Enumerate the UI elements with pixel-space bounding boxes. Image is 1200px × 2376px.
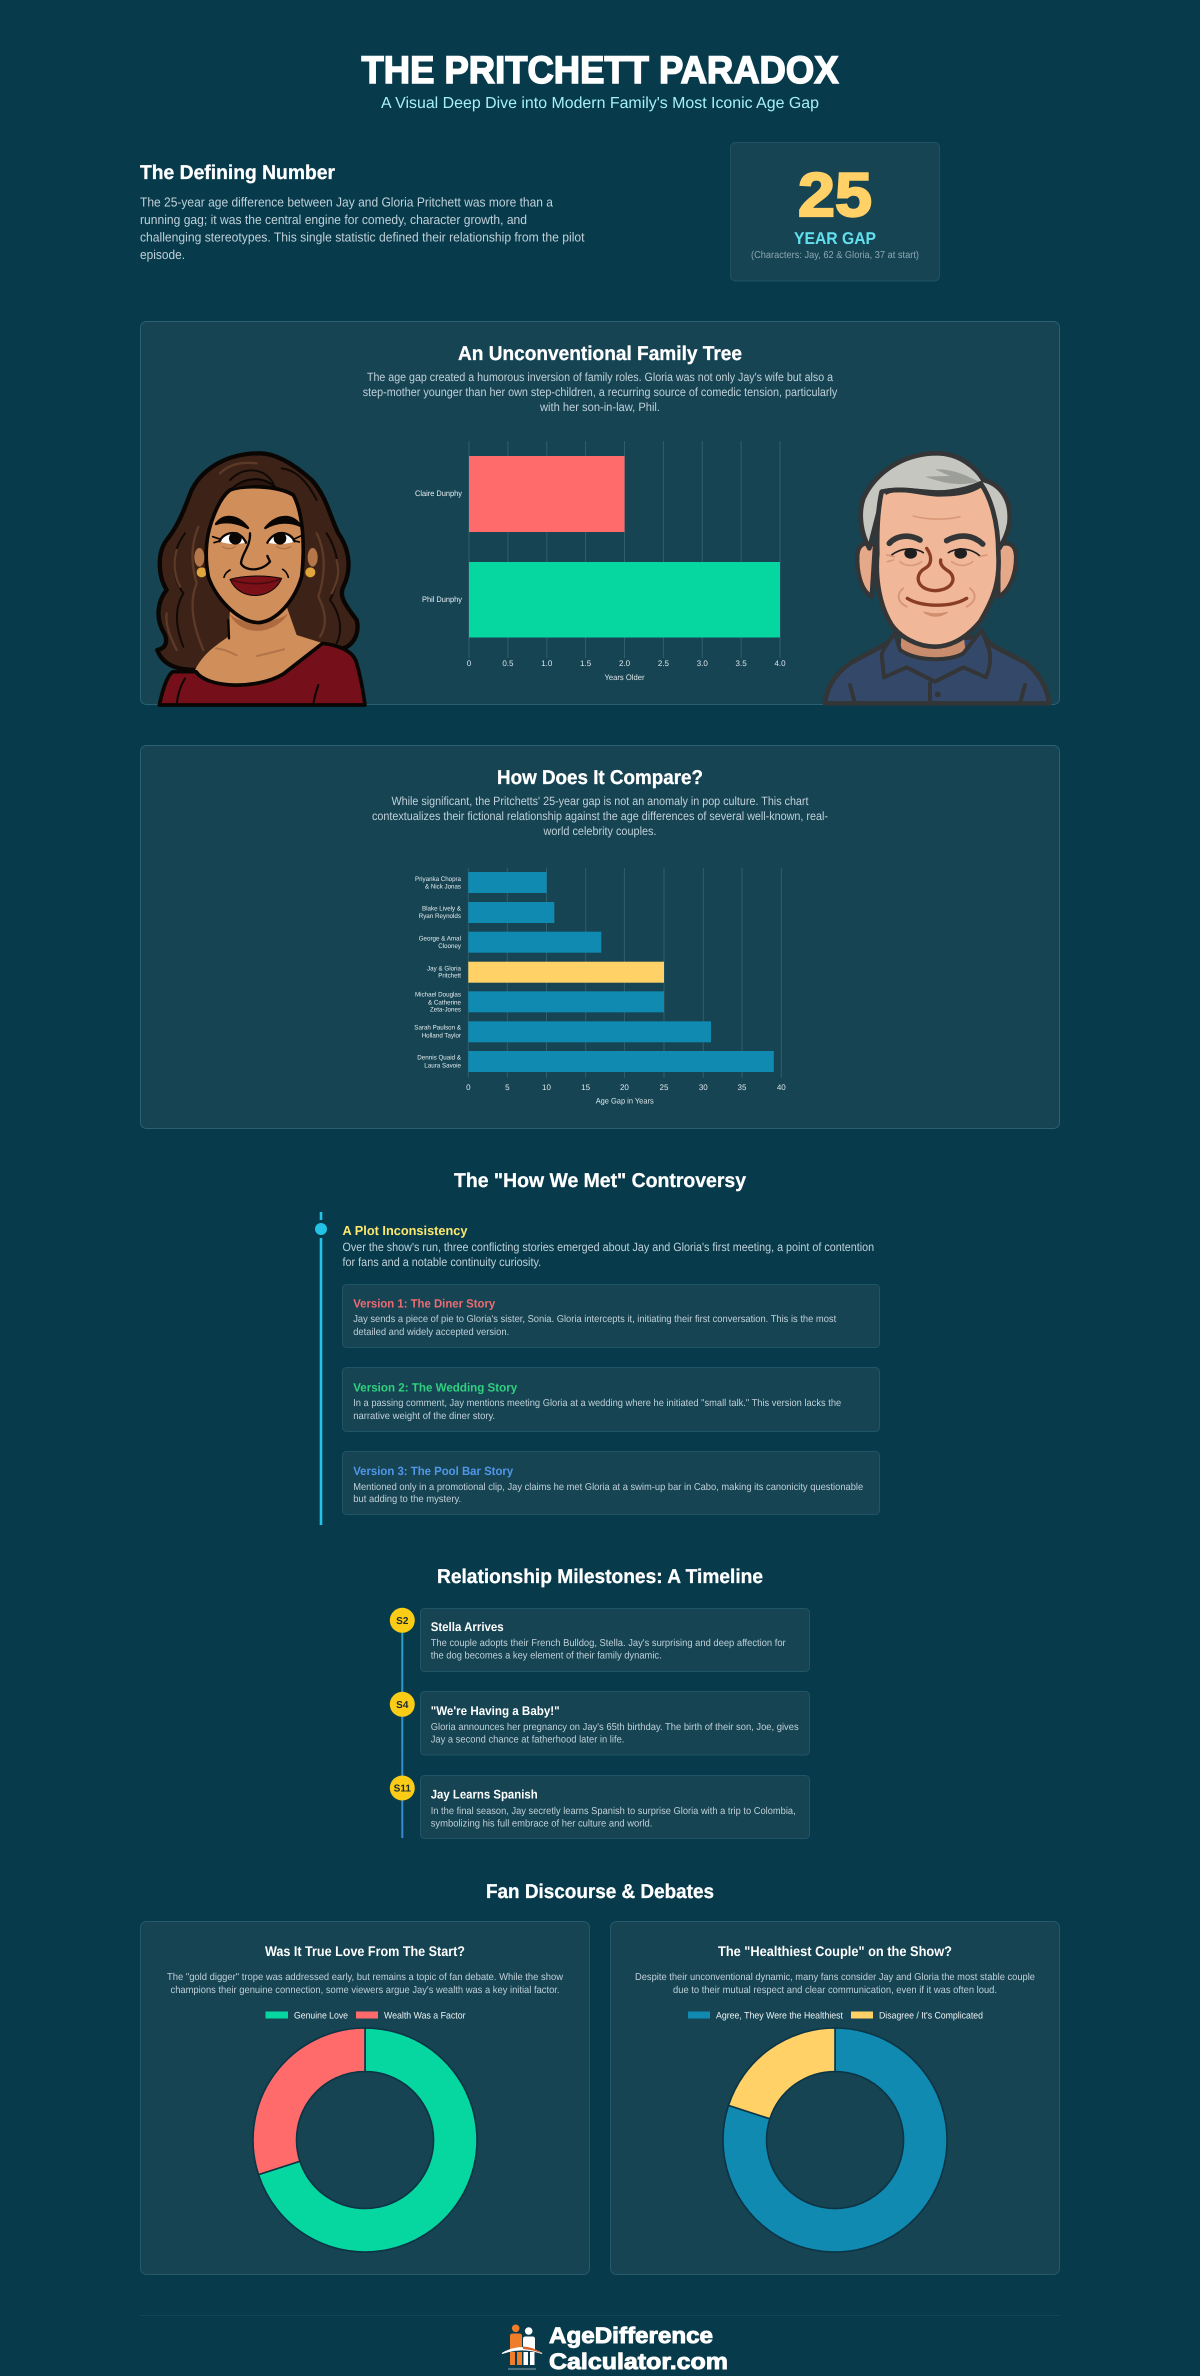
category labels [415,489,462,604]
heading: the defining number: The Defining Number [140,162,335,184]
panel: an unconventional family tree [140,322,1060,705]
subtitle: A Visual Deep Dive into Modern Family's Most Iconic Age Gap [381,95,819,112]
gridlines [468,868,781,1078]
card: version 2 [342,1368,880,1432]
x axis ticks: 10 [542,1083,551,1092]
x axis ticks: 3.5 [736,659,747,668]
bar: phil dunphy [469,562,780,638]
x axis ticks: 25 [660,1083,669,1092]
legend [266,2010,466,2022]
card: version 3 [342,1452,880,1514]
panel: true love debate [140,1922,590,2274]
category labels: Ryan Reynolds [419,913,462,920]
text block: compare description: contextualizes their fictional relationship against the age differences of several well-known, real- [372,809,828,823]
version 1 title: Version 1: The Diner Story [353,1296,496,1310]
stat number: 25 [798,161,872,230]
heading: relationship milestones: Relationship Milestones: A Timeline [437,1566,763,1588]
category labels: & Nick Jonas [425,884,462,891]
x axis ticks: 40 [777,1083,786,1092]
illustration: gloria portrait [157,453,365,705]
vertical rule [320,1212,322,1525]
hair [861,453,1010,548]
panel description: Despite their unconventional dynamic, many fans consider Jay and Gloria the most stable couple [635,1972,1035,1983]
category labels: Blake Lively & [422,906,462,913]
version 3 description: Mentioned only in a promotional clip, Jay claims he met Gloria at a swim-up bar in Cabo, making its canonicity questionable [353,1482,864,1493]
legend: Agree, They Were the Healthiest [716,2010,843,2022]
chest and neck [195,607,323,685]
text block: defining number description: The 25-year age difference between Jay and Gloria Pritchett was more than a [140,194,554,210]
title: THE PRITCHETT PARADOX [362,49,839,92]
category labels: Zeta-Jones [430,1007,462,1014]
stat label: YEAR GAP [794,229,876,248]
smile and lips [230,576,282,595]
illustration: jay portrait [825,453,1049,703]
version 1 description: Jay sends a piece of pie to Gloria's sister, Sonia. Gloria intercepts it, initiating their first conversation. This is the most [353,1314,836,1325]
version 2 title: Version 2: The Wedding Story [353,1380,518,1394]
category labels: Clooney [438,943,462,950]
text block: inconsistency description [342,1240,874,1269]
text block: inconsistency description: for fans and a notable continuity curiosity. [342,1255,541,1269]
panel description: The "gold digger" trope was addressed early, but remains a topic of fan debate. While the show [167,1972,564,1983]
milestone: season 4: Jay a second chance at fatherhood later in life. [431,1735,624,1746]
nose [918,548,953,591]
milestone: season 4: S4 [396,1700,409,1711]
x axis ticks: 15 [581,1083,591,1092]
gridlines [469,441,780,658]
timeline dot [314,1222,328,1236]
donut chart: 80 percent agree, 20 percent disagree [723,2028,947,2252]
smile [907,598,967,605]
x axis ticks: 2.0 [619,659,631,668]
x axis ticks: 0.5 [502,659,514,668]
text block: family tree description: The age gap created a humorous inversion of family roles. Gloria was not only Jay's wife but also a [367,370,833,384]
milestone: season 2 [390,1608,810,1672]
category labels: Claire Dunphy [415,489,462,498]
x axis ticks: 3.0 [697,659,708,668]
category labels: Laura Savoie [424,1062,461,1069]
stat card: 25 year gap [730,142,940,281]
milestone: season 4: "We're Having a Baby!" [431,1704,560,1718]
timeline: relationship milestones [390,1608,810,1838]
x axis ticks: 0 [466,1083,471,1092]
milestone: season 2: S2 [396,1616,409,1627]
ears [857,543,875,597]
text block: defining number description: challenging stereotypes. This single statistic defined their relationship from the pilot [140,230,585,244]
x axis title: Years Older [604,673,645,682]
card: version 1 [342,1284,880,1348]
text block: compare description: world celebrity couples. [543,824,656,838]
category labels: Dennis Quaid & [417,1055,462,1062]
milestone: season 11: In the final season, Jay secretly learns Spanish to surprise Gloria with a trip to Colombia, [431,1806,796,1817]
panel description [635,1972,1035,1996]
milestone: season 11 [390,1776,810,1838]
milestone: season 11: symbolizing his full embrace of her culture and world. [431,1818,652,1830]
milestone: season 11: S11 [394,1784,411,1794]
ears and earrings [194,548,204,567]
category labels: Pritchett [438,973,461,980]
text block: compare description: While significant, the Pritchetts' 25-year gap is not an anomaly in pop culture. This chart [392,794,809,808]
category labels: & Catherine [428,999,461,1006]
category labels: George & Amal [419,935,462,942]
face [206,487,303,623]
text block: family tree description [363,370,837,414]
category labels: Michael Douglas [415,992,462,999]
x axis ticks [466,1083,786,1092]
eyes [904,548,917,559]
panel description [167,1972,564,1996]
x axis ticks: 30 [699,1083,708,1092]
category labels: Jay & Gloria [427,965,461,972]
version 3 title: Version 3: The Pool Bar Story [353,1464,514,1478]
category labels: Holland Taylor [422,1032,462,1039]
brows [216,517,248,528]
heading: how we met controversy: The "How We Met" Controversy [454,1170,747,1192]
x axis ticks: 0 [467,659,472,668]
legend: Wealth Was a Factor [384,2010,466,2022]
panel description: due to their mutual respect and clear communication, even if it was often loud. [673,1985,997,1996]
x axis ticks: 5 [505,1083,510,1092]
version 1 description [353,1314,836,1338]
category labels: Priyanka Chopra [415,876,461,883]
panel: how does it compare [140,746,1060,1128]
category labels: Phil Dunphy [422,595,462,604]
version 2 description: In a passing comment, Jay mentions meeting Gloria at a wedding where he initiated "small talk." This version lacks the [353,1398,842,1409]
text block: compare description [372,794,828,838]
milestone: season 11: Jay Learns Spanish [431,1788,538,1802]
milestone: season 4: Gloria announces her pregnancy on Jay's 65th birthday. The birth of their son, Joe, gives [431,1722,799,1733]
eyes [219,534,246,544]
x axis ticks: 2.5 [658,659,670,668]
x axis ticks: 4.0 [774,659,786,668]
section: the defining number [140,162,585,262]
heading: fan discourse and debates: Fan Discourse & Debates [486,1881,714,1903]
dress [159,643,365,705]
x axis ticks: 35 [738,1083,747,1092]
logo wordmark: AgeDifference [549,2323,713,2348]
bar chart: years older than gloria [415,441,786,682]
panel title: The "Healthiest Couple" on the Show? [718,1943,952,1959]
subheading: a plot inconsistency: A Plot Inconsistency [342,1223,468,1238]
icon: two people [502,2324,542,2370]
panel description: champions their genuine connection, some viewers argue Jay's wealth was a key initial factor. [170,1985,560,1996]
bars [468,872,774,1072]
version 2 description [353,1398,842,1422]
category labels: Sarah Paulson & [414,1025,462,1032]
footer logo: Calculator.com [549,2349,728,2374]
footer logo [502,2323,728,2374]
panel: healthiest couple debate [610,1922,1060,2274]
version 3 description: but adding to the mystery. [353,1494,461,1505]
timeline spine [401,1620,403,1838]
brows [889,536,920,543]
x axis title: Age Gap in Years [596,1097,654,1106]
x axis ticks: 1.0 [541,659,553,668]
milestone: season 2: the dog becomes a key element of their family dynamic. [431,1651,662,1662]
milestone: season 2: Stella Arrives [431,1620,504,1634]
text block: family tree description: with her son-in-law, Phil. [539,400,660,414]
legend: Disagree / It's Complicated [879,2010,983,2022]
bar: claire dunphy [469,456,624,532]
bar: jay and gloria highlight [468,962,664,983]
version 3 description [353,1482,864,1505]
legend: Genuine Love [294,2010,348,2022]
x axis ticks [467,659,786,668]
shirt [825,637,1049,703]
heading: how does it compare: How Does It Compare? [497,767,703,789]
x axis ticks: 20 [620,1083,629,1092]
category labels [414,876,462,1069]
donut chart: 70 percent genuine love, 30 percent wealth [253,2028,477,2252]
section: plot inconsistency timeline [314,1212,880,1525]
stat note: (Characters: Jay, 62 & Gloria, 37 at start) [751,250,919,261]
text block: family tree description: step-mother younger than her own step-children, a recurring source of comedic tension, particularly [363,385,837,399]
version 1 description: detailed and widely accepted version. [353,1327,509,1338]
x axis ticks: 1.5 [580,659,592,668]
heading: family tree: An Unconventional Family Tree [458,343,742,365]
text block: defining number description [140,194,585,262]
legend [688,2010,983,2022]
text block: inconsistency description: Over the show's run, three conflicting stories emerged about Jay and Gloria's first meeting, a point of contention [342,1240,874,1254]
face [877,483,999,647]
bar chart: celebrity age gaps [414,868,786,1106]
panel title: Was It True Love From The Start? [265,1943,465,1959]
text block: defining number description: running gag; it was the central engine for comedy, character growth, and [140,212,527,227]
milestone: season 2: The couple adopts their French Bulldog, Stella. Jay's surprising and deep affection for [431,1638,786,1649]
nose [241,533,270,569]
text block: defining number description: episode. [140,247,185,262]
milestone: season 4 [390,1692,810,1755]
version 2 description: narrative weight of the diner story. [353,1411,495,1422]
